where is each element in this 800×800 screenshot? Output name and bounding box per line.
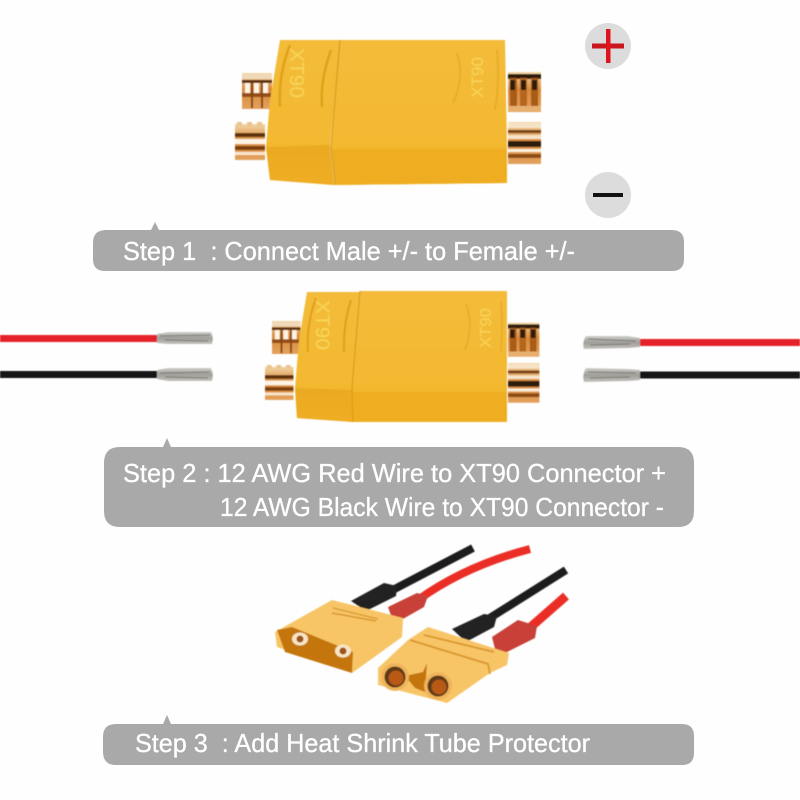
female ledge — [295, 388, 353, 422]
stripped end black right — [583, 368, 640, 382]
icon: pin lower right — [508, 363, 539, 403]
icon: gold pin upper right — [508, 72, 541, 112]
label: XT90 left: XT90 — [311, 300, 332, 350]
icon: minus polarity badge — [585, 172, 631, 218]
connector photo: step 3 XT90 pair with heat shrink — [275, 548, 566, 703]
icon: gold pin lower left — [235, 122, 265, 160]
thin red wire rear — [418, 549, 530, 600]
female housing — [266, 40, 340, 185]
label: XT90 left: XT90 — [285, 48, 307, 98]
female socket bridge — [405, 663, 427, 692]
right stripped wires — [583, 336, 800, 382]
heat shrink black rear — [351, 583, 397, 611]
thin black wire rear — [385, 548, 473, 594]
male housing — [331, 40, 507, 185]
heat shrink red rear — [388, 593, 428, 624]
icon: gold pin lower right — [508, 122, 541, 164]
female housing ledge — [266, 145, 334, 185]
icon: plus polarity badge — [585, 23, 631, 69]
heat shrink black front — [452, 614, 497, 642]
step 1 banner — [93, 222, 684, 271]
male contact left — [292, 632, 308, 646]
red wire right — [640, 339, 800, 346]
connector photo: step 2 XT90 — [265, 291, 539, 422]
step 2 banner — [104, 438, 694, 527]
male housing — [352, 291, 507, 422]
icon: pin upper right — [508, 323, 539, 357]
left stripped wires — [0, 332, 213, 381]
male contact right — [335, 644, 351, 658]
step 2 text line 2: 12 AWG Black Wire to XT90 Connector - — [220, 492, 664, 522]
black wire right — [640, 372, 800, 378]
stripped end black left — [157, 368, 213, 381]
step 2 text line 1: Step 2 : 12 AWG Red Wire to XT90 Connector + — [123, 458, 666, 488]
label: XT90 right: XT90 — [468, 57, 487, 98]
red wire left — [0, 335, 157, 342]
male connector opening — [277, 627, 353, 673]
icon: pin upper left — [272, 321, 300, 354]
step 3 text: Step 3 : Add Heat Shrink Tube Protector — [135, 728, 590, 758]
heat shrink red front — [492, 620, 537, 657]
step 1 text: Step 1 : Connect Male +/- to Female +/- — [123, 236, 575, 266]
thin black wire front — [485, 570, 566, 621]
female socket right — [424, 672, 452, 700]
female housing — [295, 292, 360, 422]
male housing ledge — [331, 149, 507, 185]
step 3 banner — [103, 715, 694, 765]
black wire left — [0, 371, 157, 378]
icon: gold pin upper left — [242, 73, 272, 109]
stripped end red left — [157, 332, 213, 344]
female connector housing — [378, 627, 509, 703]
stripped end red right — [583, 336, 640, 349]
thin red wire front — [525, 596, 566, 632]
male connector housing — [275, 600, 403, 673]
female socket left — [381, 663, 409, 691]
connector photo: step 1 mated XT90 — [235, 40, 541, 185]
label: XT90 right: XT90 — [478, 308, 495, 348]
male ledge — [352, 392, 507, 422]
icon: pin lower left — [265, 365, 294, 400]
